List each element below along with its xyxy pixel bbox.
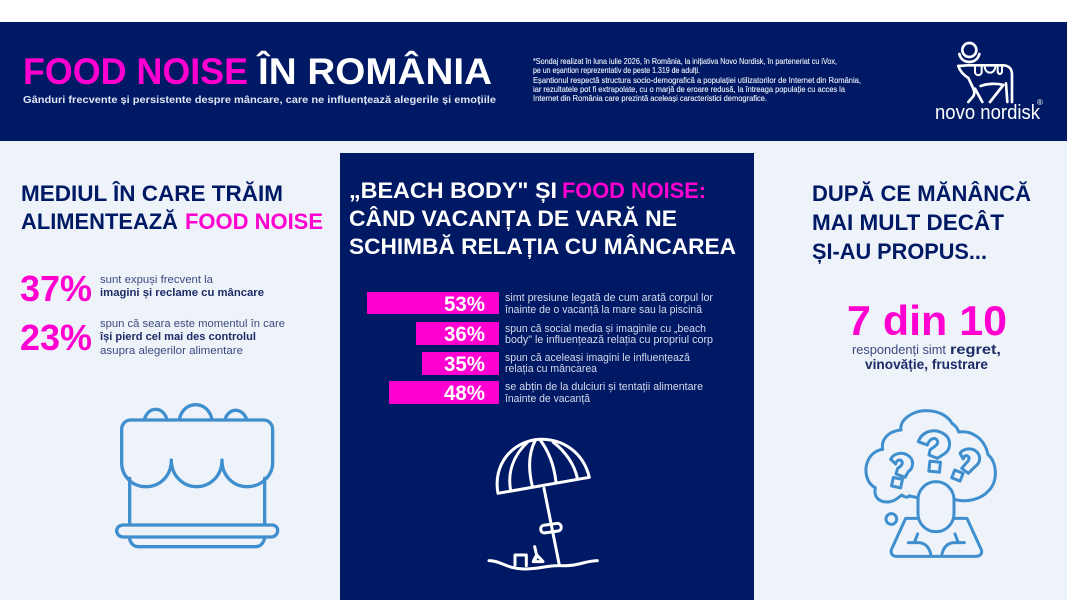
bar: 53%: 53% (444, 293, 485, 316)
survey note (533, 57, 861, 103)
heading: beach body: FOOD NOISE: (562, 178, 706, 203)
heading: environment: MEDIUL ÎN CARE TRĂIM (21, 181, 283, 206)
bar chart (367, 292, 713, 405)
heading: environment (21, 181, 323, 234)
subtitle: Gânduri frecvente și persistente despre mâncare, care ne influențează alegerile și emoțiile (23, 94, 496, 106)
icon: beach umbrella (489, 439, 597, 569)
stat: 37% (20, 268, 264, 309)
survey note: Internet din România care prezintă aceleași caracteristici demografice. (533, 94, 767, 103)
panel: header band (0, 22, 1067, 141)
panel: after overeating (812, 181, 1031, 556)
title: ÎN ROMÂNIA (256, 50, 492, 92)
stat: 7 din 10: regret, (950, 342, 1001, 357)
logo: novo nordisk: ® (1037, 98, 1043, 107)
icon: head with question marks (866, 411, 995, 556)
logo: novo nordisk: novo nordisk (935, 101, 1041, 124)
bar: 48%: se abțin de la dulciuri și tentații alimentare (505, 381, 703, 393)
heading: environment: FOOD NOISE (185, 209, 323, 234)
heading: after overeating (812, 181, 1031, 264)
bar: 35%: 35% (444, 353, 485, 376)
bar: 36% (416, 322, 713, 346)
panel: beach body (340, 153, 754, 600)
stat: 23%: își pierd cel mai des controlul (99, 331, 256, 343)
survey note: pe un eșantion reprezentativ de peste 1.319 de adulți. (533, 66, 700, 75)
stat: 23%: asupra alegerilor alimentare (100, 345, 243, 357)
stat: 7 din 10: vinovăție, frustrare (865, 357, 988, 372)
bar: 36%: 36% (444, 323, 485, 346)
survey note: iar rezultatele pot fi extrapolate, cu o marjă de eroare redusă, la întreaga populație cu acces la (533, 85, 846, 94)
bar: 48%: înainte de vacanță (504, 393, 591, 405)
heading: environment: ALIMENTEAZĂ (21, 209, 178, 234)
stat: 23%: spun că seara este momentul în care (100, 318, 285, 330)
heading: after overeating: ȘI-AU PROPUS... (812, 239, 987, 264)
heading: after overeating: MAI MULT DECÂT (812, 210, 1005, 235)
bar: 36%: spun că social media și imaginile cu „beach (505, 323, 706, 335)
heading: beach body: CÂND VACANȚA DE VARĂ NE (349, 206, 677, 231)
heading: beach body (349, 178, 736, 259)
survey note: Eșantionul respectă structura socio-demografică a populației utilizatorilor de Internet din România, (533, 76, 861, 85)
stat: 37%: imagini și reclame cu mâncare (100, 287, 264, 299)
bar: 48%: 48% (444, 382, 485, 405)
bar: 53%: înainte de o vacanță la mare sau la piscină (504, 304, 703, 316)
bar: 35%: spun că aceleași imagini le influențează (505, 352, 691, 364)
stat: 7 din 10: respondenți simt (852, 343, 947, 357)
bar: 36%: body" le influențează relația cu propriul corp (505, 334, 713, 346)
bar: 35%: relația cu mâncarea (505, 363, 598, 375)
stat: 37%: 37% (20, 268, 92, 309)
icon: cake (117, 405, 278, 547)
heading: after overeating: DUPĂ CE MĂNÂNCĂ (812, 181, 1031, 206)
bar: 48% (389, 381, 703, 405)
heading: beach body: SCHIMBĂ RELAȚIA CU MÂNCAREA (349, 234, 736, 259)
heading: beach body: „BEACH BODY" ȘI (349, 178, 557, 203)
title: FOOD NOISE (23, 51, 248, 92)
stat: 7 din 10: 7 din 10 (847, 297, 1007, 344)
stat: 37%: sunt expuși frecvent la (100, 274, 213, 286)
bar: 53%: simt presiune legată de cum arată corpul lor (505, 292, 713, 304)
stat: 23%: 23% (20, 317, 92, 358)
logo: novo nordisk (935, 43, 1043, 124)
bar: 53% (367, 292, 713, 316)
title (23, 50, 492, 92)
bar: 35% (422, 352, 691, 376)
survey note: *Sondaj realizat în luna iulie 2026, în România, la inițiativa Novo Nordisk, în parteneriat cu iVox, (533, 57, 837, 66)
stat: 23% (20, 317, 285, 358)
panel: environment (20, 181, 323, 547)
stat: 7 din 10 (847, 297, 1007, 372)
